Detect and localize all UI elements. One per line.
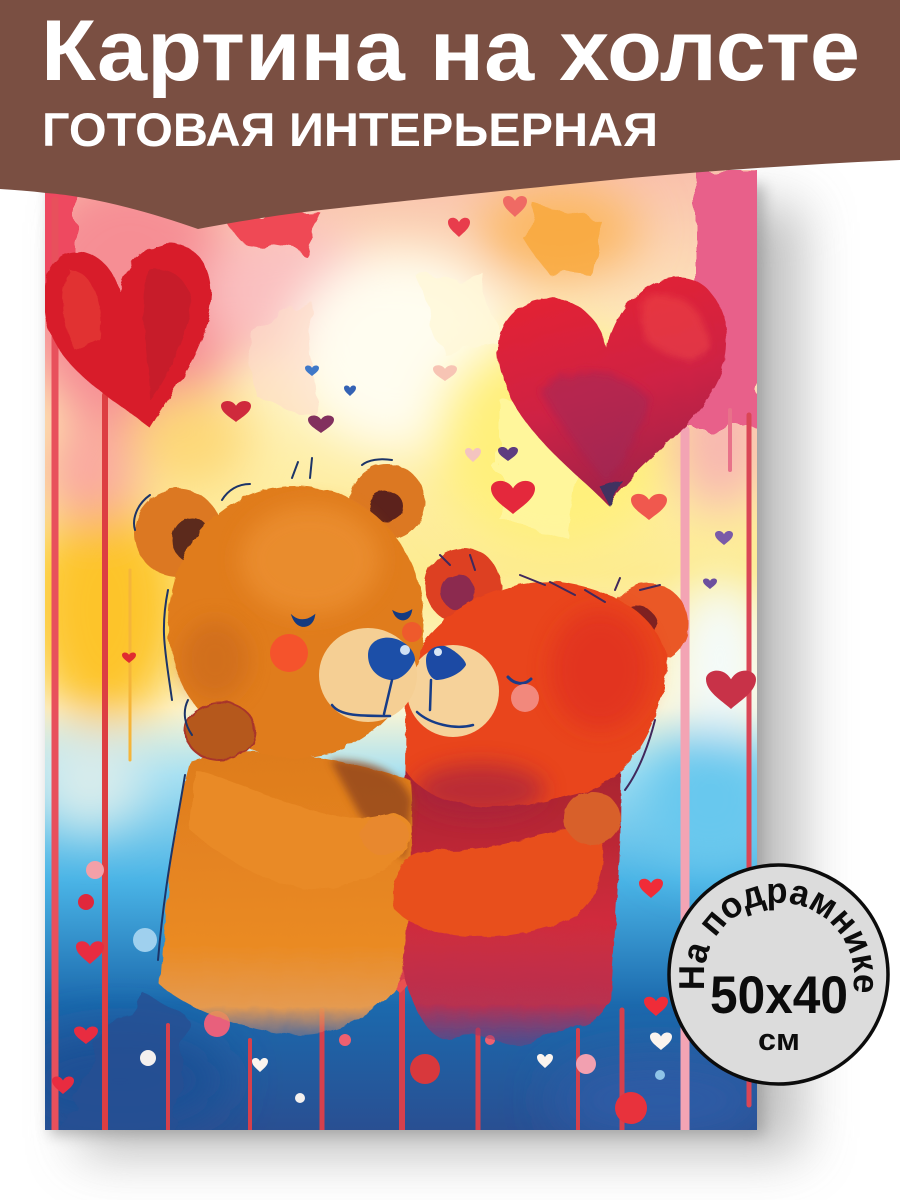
right bear muzzle: [407, 645, 499, 737]
right bear arm: [392, 829, 604, 937]
left bear nose: [368, 638, 415, 680]
right bear paw: [564, 791, 620, 845]
badge curved label: На подрамнике: [679, 883, 874, 992]
right bear mouth: [417, 680, 473, 727]
bear left (orange): [134, 458, 425, 1035]
bottom paint dots: [78, 861, 665, 1124]
badge size: 50x40: [710, 966, 848, 1025]
canvas shadow: [50, 185, 802, 1155]
left bear cheek: [270, 634, 308, 672]
small floating hearts: [52, 196, 756, 1094]
painted background: [10, 165, 780, 1140]
right bear nose: [426, 646, 466, 680]
left bear arm: [189, 771, 412, 860]
left bear mouth: [332, 680, 392, 716]
left bear fur lines: [134, 458, 392, 960]
right bear cheek: [511, 684, 539, 712]
bear right (red): [400, 548, 688, 1046]
left bear hand: [361, 815, 409, 855]
badge unit: см: [758, 1022, 800, 1057]
right bear body: [400, 770, 620, 1046]
title: Картина на холсте: [41, 3, 860, 99]
heart balloon right: [498, 277, 727, 506]
subtitle: ГОТОВАЯ ИНТЕРЬЕРНАЯ: [42, 103, 658, 156]
size badge: [631, 863, 890, 1124]
left bear paw on shoulder: [185, 702, 255, 760]
left bear eyes: [293, 616, 314, 626]
right bear eye: [508, 677, 531, 683]
right bear ears: [425, 548, 688, 663]
left bear head: [168, 486, 424, 758]
painting: teddy bears on canvas: [10, 165, 780, 1140]
left bear muzzle: [319, 628, 417, 722]
fur lines right bear: [440, 555, 660, 790]
paint drips: [52, 335, 752, 1130]
left bear body: [160, 752, 412, 1035]
heart balloon left: [43, 243, 211, 428]
right bear head: [405, 582, 668, 806]
header banner: [0, 0, 900, 229]
left bear ears: [134, 464, 425, 577]
